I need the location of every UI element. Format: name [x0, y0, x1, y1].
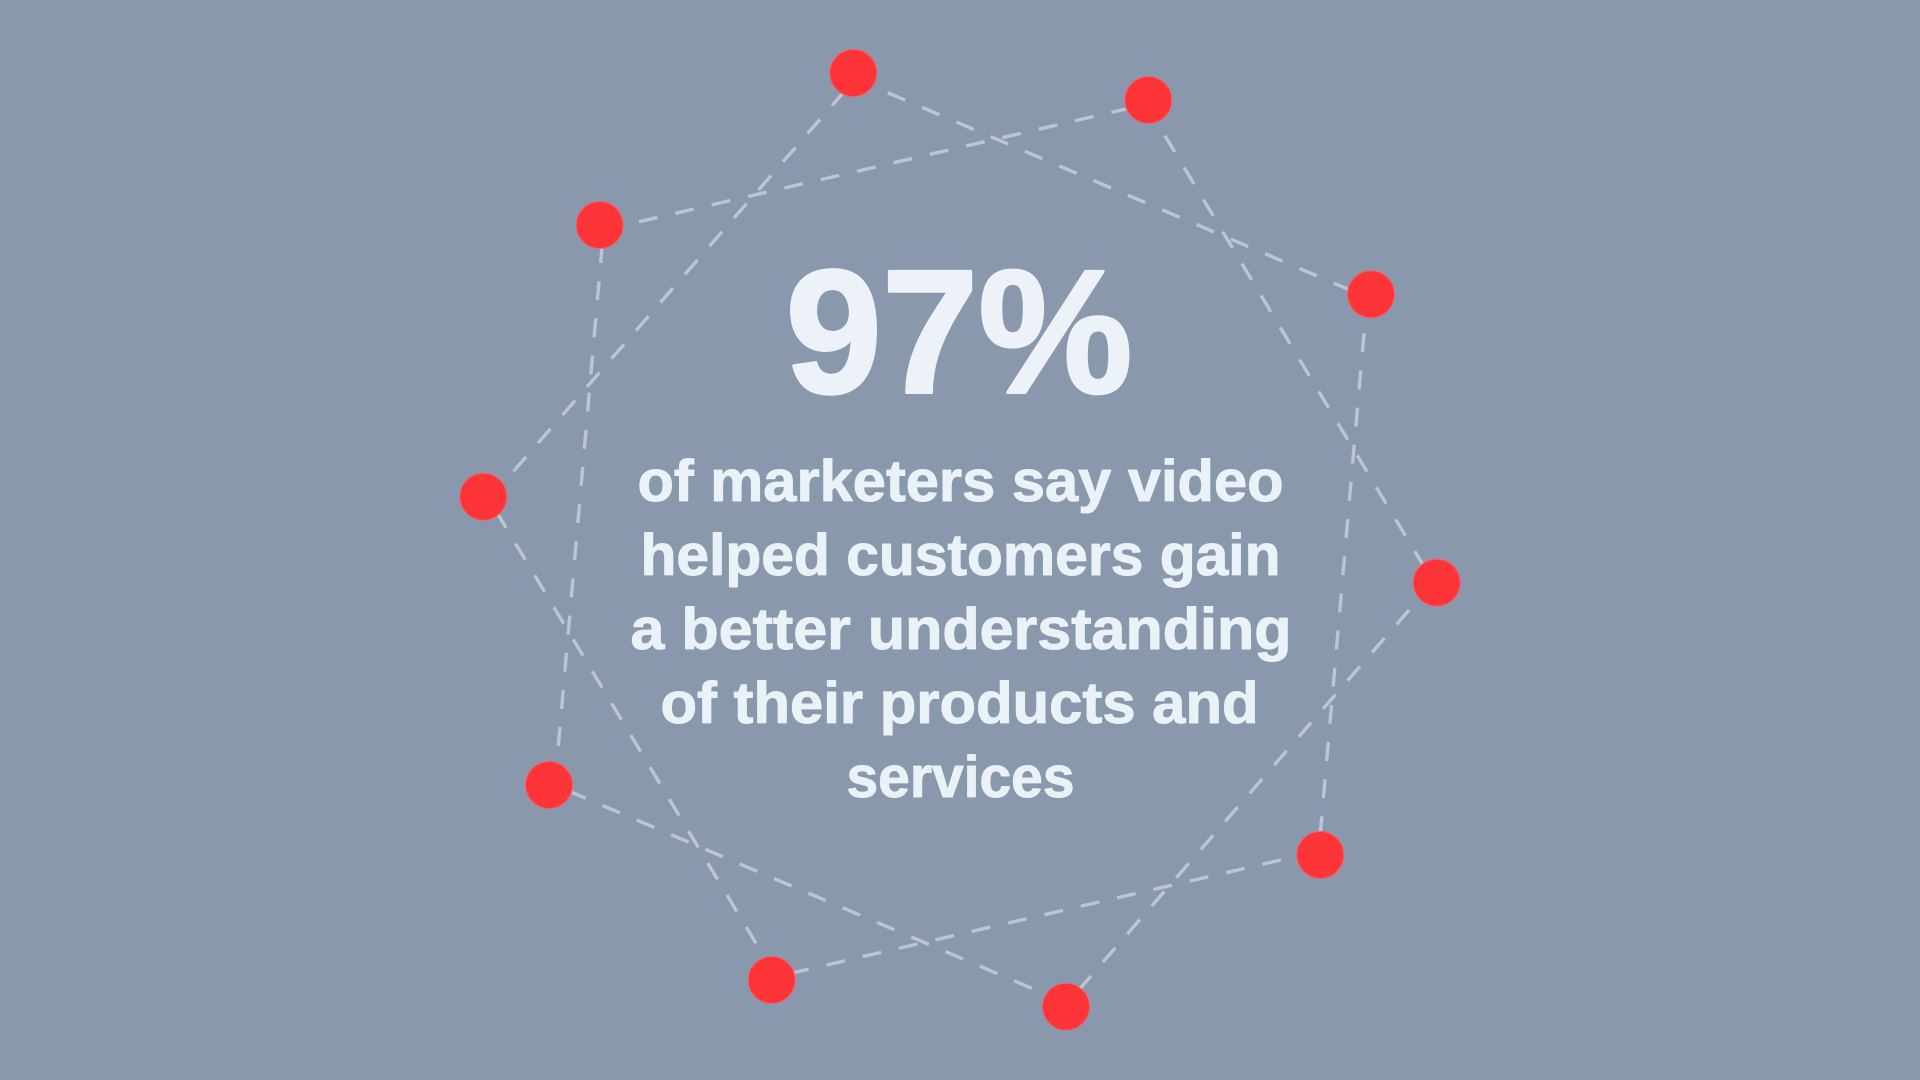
description text: a better understanding [630, 597, 1292, 662]
description text [630, 449, 1292, 810]
description text: of marketers say video [638, 449, 1284, 514]
description text: helped customers gain [640, 523, 1280, 588]
headline statistic: 97% [786, 234, 1132, 430]
dashed star connecting lines [496, 91, 1425, 991]
red dots ring [460, 50, 1460, 1030]
description text: of their products and [660, 671, 1258, 736]
description text: services [846, 745, 1074, 810]
